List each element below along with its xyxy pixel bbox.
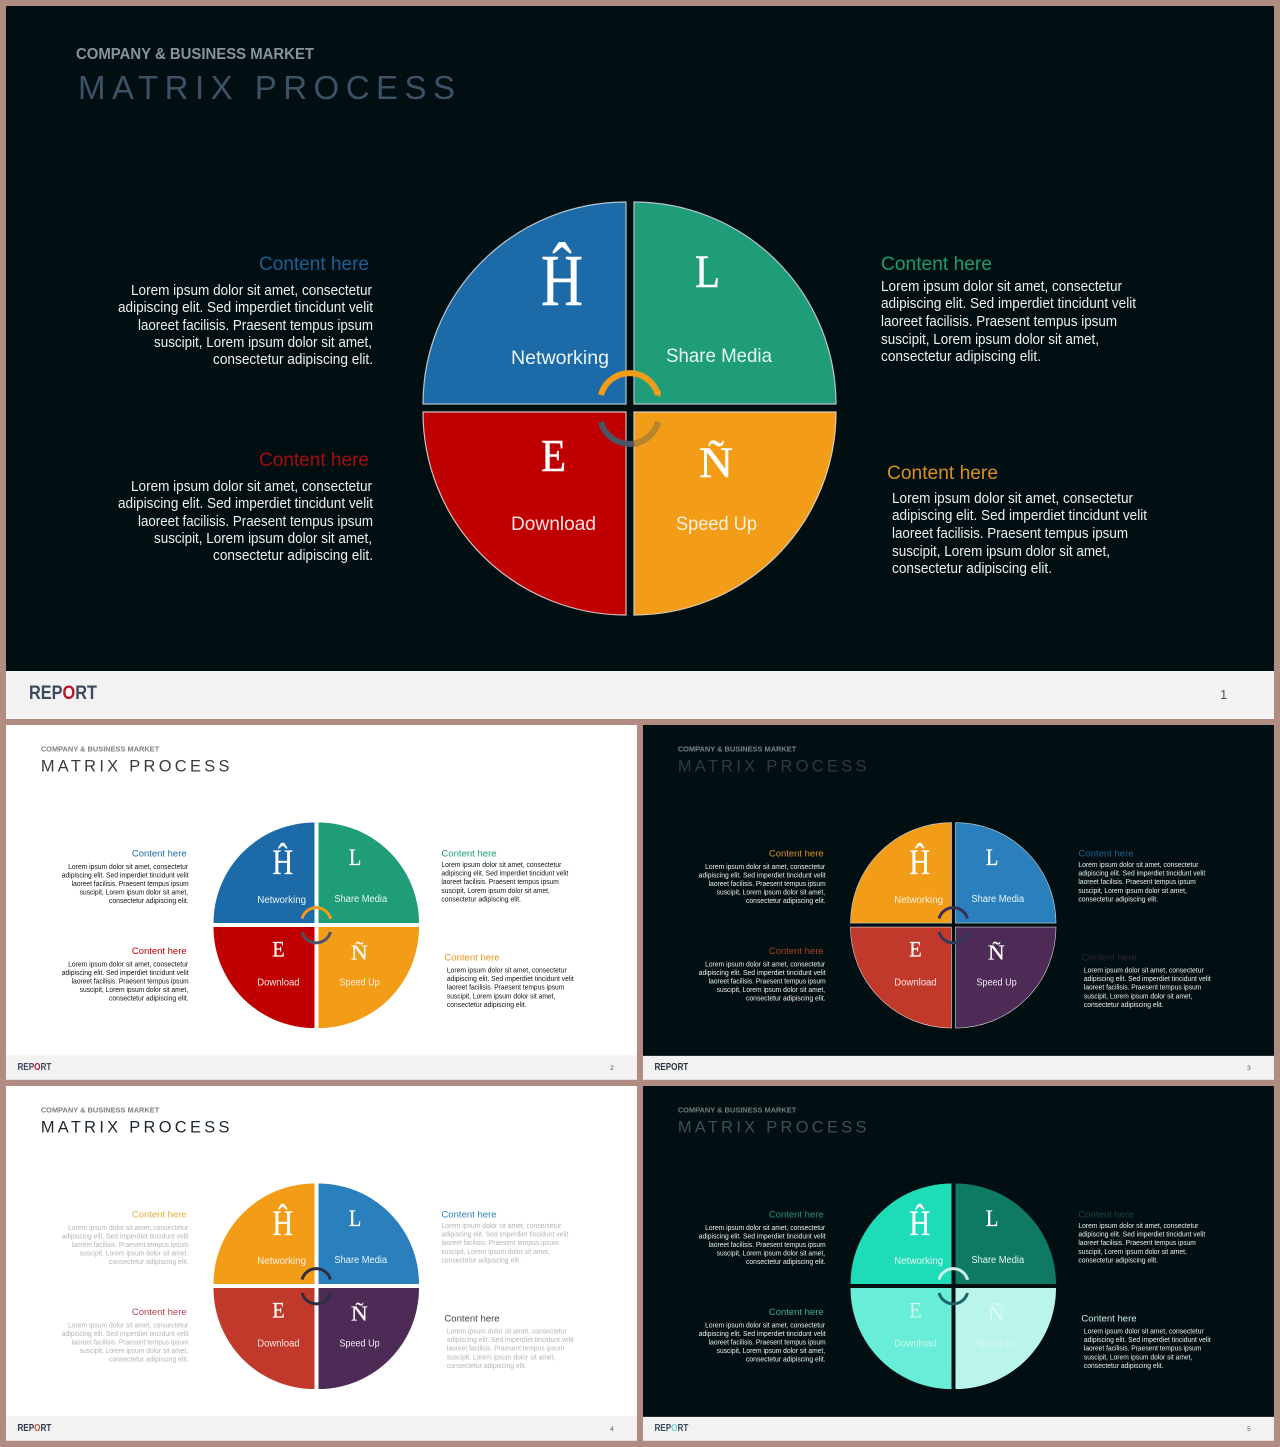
slide 5 background	[643, 1086, 1274, 1417]
body: suscipit, Lorem ipsum dolor sit amet,	[881, 332, 1099, 348]
slide 1 text block: bottom left	[118, 450, 373, 564]
body	[62, 959, 189, 1003]
body: suscipit, Lorem ipsum dolor sit amet,	[441, 1247, 550, 1256]
slide 2 quadrant: Share Media: Share Media	[334, 894, 388, 905]
body: suscipit, Lorem ipsum dolor sit amet,	[892, 544, 1110, 560]
slide 2 text block: top left	[62, 848, 189, 905]
body: laoreet facilisis. Praesent tempus ipsum	[709, 977, 826, 986]
body: consectetur adipiscing elit.	[746, 1355, 826, 1364]
body: laoreet facilisis. Praesent tempus ipsum	[72, 879, 189, 888]
slide 3 cycle arrows	[939, 908, 967, 943]
body	[1078, 1221, 1205, 1265]
slide 4 quadrant: Networking: Networking	[257, 1256, 306, 1267]
body: laoreet facilisis. Praesent tempus ipsum	[881, 314, 1117, 330]
heading: Content here	[259, 254, 369, 275]
slide 1 quadrant: Speed Up: Speed Up	[676, 513, 757, 535]
slide 1 quadrant: Networking: Ĥ	[541, 240, 583, 321]
body: adipiscing elit. Sed imperdiet tincidunt velit	[62, 870, 189, 879]
body: Lorem ipsum dolor sit amet, consectetur	[131, 283, 372, 299]
body: suscipit, Lorem ipsum dolor sit amet,	[717, 985, 825, 994]
body: laoreet facilisis. Praesent tempus ipsum	[441, 877, 559, 886]
slide 5 quadrant: Speed Up: Speed Up	[976, 1339, 1017, 1350]
slide 4 quadrant: Download: E	[272, 1297, 285, 1322]
slide 3 quadrant: Download: E	[909, 936, 922, 961]
slide 4 subtitle: COMPANY & BUSINESS MARKET	[41, 1105, 160, 1114]
body	[62, 1223, 189, 1266]
slide 2 quadrant: Speed Up	[318, 927, 419, 1028]
heading: Content here	[132, 1307, 187, 1318]
heading: Content here	[132, 946, 187, 957]
body: consectetur adipiscing elit.	[1084, 1000, 1163, 1009]
slide 3 quadrant: Speed Up: Speed Up	[976, 978, 1017, 989]
body: consectetur adipiscing elit.	[881, 349, 1041, 365]
slide 5 footer: REPORT	[654, 1423, 688, 1434]
body: adipiscing elit. Sed imperdiet tincidunt velit	[1084, 1335, 1211, 1344]
slide 2 text block: bottom left	[62, 946, 189, 1003]
body: Lorem ipsum dolor sit amet, consectetur	[1084, 1326, 1204, 1335]
body: suscipit, Lorem ipsum dolor sit amet,	[80, 1249, 188, 1258]
slide 1 subtitle: COMPANY & BUSINESS MARKET	[76, 46, 315, 63]
heading: Content here	[444, 1313, 500, 1324]
slide 4 quadrant: Networking	[213, 1184, 315, 1284]
body: adipiscing elit. Sed imperdiet tincidunt velit	[1078, 1229, 1205, 1238]
body: suscipit, Lorem ipsum dolor sit amet,	[441, 886, 550, 895]
body: laoreet facilisis. Praesent tempus ipsum	[441, 1238, 559, 1247]
body	[1084, 965, 1211, 1009]
slide 1 text block: top left	[118, 254, 373, 368]
body: consectetur adipiscing elit.	[213, 548, 373, 564]
body: Lorem ipsum dolor sit amet, consectetur	[441, 1221, 562, 1230]
slide 1 quadrant: Share Media	[634, 202, 836, 404]
slide 4 quadrant: Share Media: L	[349, 1206, 361, 1232]
slide 5 title: MATRIX PROCESS	[678, 1118, 866, 1136]
slide 4 quadrant: Speed Up: Ñ	[351, 1301, 368, 1325]
heading: Content here	[881, 254, 992, 275]
slide 5 quadrant: Share Media: L	[986, 1206, 998, 1232]
slide 3 text block: top right	[1078, 848, 1205, 904]
slide 1 text block: bottom right	[887, 463, 1147, 577]
body: consectetur adipiscing elit.	[213, 352, 373, 368]
slide 1 quadrant: Speed Up	[634, 412, 836, 615]
body: suscipit, Lorem ipsum dolor sit amet,	[1084, 992, 1192, 1001]
body: laoreet facilisis. Praesent tempus ipsum	[1078, 877, 1196, 886]
body: suscipit, Lorem ipsum dolor sit amet,	[80, 985, 188, 994]
slide 5 quadrant: Download	[850, 1288, 952, 1389]
body: laoreet facilisis. Praesent tempus ipsum	[1084, 1344, 1201, 1353]
slide 2 footer: REPORT	[17, 1062, 51, 1073]
body: consectetur adipiscing elit.	[1084, 1361, 1163, 1370]
slide 4 text block: bottom right	[444, 1313, 574, 1370]
slide 5 quadrant: Speed Up	[955, 1288, 1056, 1389]
body: consectetur adipiscing elit.	[109, 1257, 189, 1266]
slide 4 footer	[6, 1417, 637, 1441]
body: suscipit, Lorem ipsum dolor sit amet,	[1078, 886, 1187, 895]
body: adipiscing elit. Sed imperdiet tincidunt velit	[118, 496, 373, 512]
heading: Content here	[769, 848, 824, 859]
body	[447, 1326, 574, 1370]
body: adipiscing elit. Sed imperdiet tincidunt velit	[62, 968, 189, 977]
body: suscipit, Lorem ipsum dolor sit amet,	[447, 1353, 555, 1362]
slide 5 text block: top right	[1078, 1209, 1205, 1265]
body: suscipit, Lorem ipsum dolor sit amet,	[1078, 1247, 1187, 1256]
slide 4 text block: top right	[441, 1209, 568, 1265]
body: adipiscing elit. Sed imperdiet tincidunt velit	[699, 1231, 826, 1240]
slide 2 footer	[6, 1056, 637, 1080]
slide 5 quadrant: Networking: Ĥ	[909, 1203, 930, 1243]
slide 5 text block: top left	[699, 1209, 826, 1266]
body: adipiscing elit. Sed imperdiet tincidunt velit	[441, 1229, 568, 1238]
body	[441, 1221, 568, 1265]
slide 4 footer: 4	[610, 1426, 614, 1433]
heading: Content here	[441, 848, 497, 859]
body: laoreet facilisis. Praesent tempus ipsum	[709, 1240, 826, 1249]
slide 2 quadrant: Networking	[213, 823, 315, 923]
heading: Content here	[1078, 848, 1134, 859]
slide 2 text block: bottom right	[444, 952, 574, 1009]
body: Lorem ipsum dolor sit amet, consectetur	[1084, 965, 1204, 974]
slide 5: dark slide, teal palette	[643, 1086, 1274, 1441]
slide 5 quadrant: Networking: Networking	[894, 1256, 943, 1267]
body: laoreet facilisis. Praesent tempus ipsum	[138, 318, 373, 334]
slide 3 quadrant: Networking	[850, 823, 952, 923]
body: Lorem ipsum dolor sit amet, consectetur	[131, 479, 372, 495]
body: adipiscing elit. Sed imperdiet tincidunt velit	[699, 870, 826, 879]
body: adipiscing elit. Sed imperdiet tincidunt velit	[892, 508, 1147, 524]
slide 4 quadrant: Download	[213, 1288, 315, 1389]
slide 3 title: MATRIX PROCESS	[678, 757, 866, 775]
body: suscipit, Lorem ipsum dolor sit amet,	[80, 888, 188, 897]
body	[118, 283, 373, 368]
body: consectetur adipiscing elit.	[109, 994, 189, 1003]
heading: Content here	[132, 848, 187, 859]
slide 2 title: MATRIX PROCESS	[41, 757, 229, 775]
body	[118, 479, 373, 564]
slide 3 background	[643, 725, 1274, 1056]
slide 2 quadrant: Download: Download	[257, 978, 300, 989]
slide 1 quadrant: Speed Up: Ñ	[699, 440, 733, 487]
body: suscipit, Lorem ipsum dolor sit amet,	[447, 992, 555, 1001]
body: Lorem ipsum dolor sit amet, consectetur	[68, 1223, 189, 1232]
body: consectetur adipiscing elit.	[746, 896, 826, 905]
body	[62, 862, 189, 905]
body: consectetur adipiscing elit.	[447, 1361, 526, 1370]
body: adipiscing elit. Sed imperdiet tincidunt velit	[118, 300, 373, 316]
slide 2 quadrant: Download	[213, 927, 315, 1028]
body: adipiscing elit. Sed imperdiet tincidunt velit	[699, 968, 826, 977]
heading: Content here	[444, 952, 500, 963]
slide 1 footer: REPORT	[29, 682, 97, 704]
body: adipiscing elit. Sed imperdiet tincidunt velit	[1078, 868, 1205, 877]
body: Lorem ipsum dolor sit amet, consectetur	[705, 1223, 826, 1232]
body: Lorem ipsum dolor sit amet, consectetur	[68, 862, 189, 871]
body: laoreet facilisis. Praesent tempus ipsum	[1078, 1238, 1196, 1247]
slide 4: white slide, warm palette, grey body text	[6, 1086, 637, 1441]
body: suscipit, Lorem ipsum dolor sit amet,	[1084, 1353, 1192, 1362]
body: consectetur adipiscing elit.	[746, 1257, 826, 1266]
slide 2 quadrant: Download: E	[272, 936, 285, 961]
body: suscipit, Lorem ipsum dolor sit amet,	[154, 335, 372, 351]
slide 5 quadrant: Share Media	[955, 1184, 1056, 1284]
slide 3 text block: bottom right	[1081, 952, 1211, 1009]
body: laoreet facilisis. Praesent tempus ipsum	[1084, 983, 1201, 992]
slide 4 text block: bottom left	[62, 1307, 189, 1364]
body: suscipit, Lorem ipsum dolor sit amet,	[717, 888, 825, 897]
slide 3 quadrant: Share Media: L	[986, 845, 998, 871]
slide 1 text block: top right	[881, 254, 1136, 365]
body: Lorem ipsum dolor sit amet, consectetur	[881, 279, 1122, 295]
body: laoreet facilisis. Praesent tempus ipsum	[892, 526, 1128, 542]
slide 4 quadrant: Download: Download	[257, 1339, 300, 1350]
body: Lorem ipsum dolor sit amet, consectetur	[705, 1320, 826, 1329]
body: Lorem ipsum dolor sit amet, consectetur	[705, 862, 826, 871]
slide 4 quadrant: Speed Up	[318, 1288, 419, 1389]
slide 4 quadrant: Share Media: Share Media	[334, 1255, 388, 1266]
body: suscipit, Lorem ipsum dolor sit amet,	[80, 1346, 188, 1355]
slide 1 footer: 1	[1220, 687, 1227, 702]
body: adipiscing elit. Sed imperdiet tincidunt velit	[881, 296, 1136, 312]
body	[892, 491, 1147, 577]
body: suscipit, Lorem ipsum dolor sit amet,	[717, 1249, 825, 1258]
heading: Content here	[1081, 1313, 1137, 1324]
slide 5 subtitle: COMPANY & BUSINESS MARKET	[678, 1105, 797, 1114]
body	[447, 965, 574, 1009]
heading: Content here	[1078, 1209, 1134, 1220]
slide 3 footer: 3	[1247, 1065, 1251, 1072]
body	[699, 1223, 826, 1266]
body: laoreet facilisis. Praesent tempus ipsum	[72, 1240, 189, 1249]
slide 3 quadrant: Speed Up: Ñ	[988, 940, 1005, 964]
slide 3: dark slide, warm palette	[643, 725, 1274, 1080]
slide 1 quadrant: Download: Download	[511, 513, 596, 535]
heading: Content here	[769, 1307, 824, 1318]
slide 5 footer: 5	[1247, 1426, 1251, 1433]
slide 2: white slide	[6, 725, 637, 1080]
heading: Content here	[769, 946, 824, 957]
slide 1 quadrant: Download: E	[541, 431, 566, 481]
body: consectetur adipiscing elit.	[109, 896, 189, 905]
heading: Content here	[132, 1209, 187, 1220]
slide 5 footer	[643, 1417, 1274, 1441]
body: Lorem ipsum dolor sit amet, consectetur	[447, 965, 567, 974]
slide 3 subtitle: COMPANY & BUSINESS MARKET	[678, 744, 797, 753]
slide 4 quadrant: Share Media	[318, 1184, 419, 1284]
slide 3 text block: bottom left	[699, 946, 826, 1003]
body	[441, 860, 568, 904]
body: laoreet facilisis. Praesent tempus ipsum	[72, 1338, 189, 1347]
body: laoreet facilisis. Praesent tempus ipsum	[447, 983, 564, 992]
body	[699, 1320, 826, 1364]
body: suscipit, Lorem ipsum dolor sit amet,	[717, 1346, 825, 1355]
heading: Content here	[259, 450, 369, 471]
slide 1 footer	[6, 671, 1274, 719]
slide 1: large dark slide	[6, 6, 1274, 719]
slide 1 title: MATRIX PROCESS	[78, 69, 455, 106]
slide 2 text block: top right	[441, 848, 568, 904]
slide 5 quadrant: Share Media: Share Media	[971, 1255, 1025, 1266]
body	[1084, 1326, 1211, 1370]
slide 4 cycle arrows	[302, 1269, 330, 1304]
slide 5 quadrant: Networking	[850, 1184, 952, 1284]
slide 5 quadrant: Download: Download	[894, 1339, 937, 1350]
slide 3 quadrant: Share Media	[955, 823, 1056, 923]
slide 5 text block: bottom right	[1081, 1313, 1211, 1370]
body	[1078, 860, 1205, 904]
slide 3 quadrant: Download	[850, 927, 952, 1028]
slide 3 footer: REPORT	[654, 1062, 688, 1073]
slide 1 quadrant: Networking	[423, 202, 626, 404]
body: Lorem ipsum dolor sit amet, consectetur	[1078, 1221, 1199, 1230]
body: adipiscing elit. Sed imperdiet tincidunt velit	[699, 1329, 826, 1338]
slide 5 text block: bottom left	[699, 1307, 826, 1364]
slide 2 cycle arrows	[302, 908, 332, 943]
body: laoreet facilisis. Praesent tempus ipsum	[72, 977, 189, 986]
body: consectetur adipiscing elit.	[441, 1256, 521, 1265]
body: Lorem ipsum dolor sit amet, consectetur	[68, 1320, 189, 1329]
slide 4 footer: REPORT	[17, 1423, 51, 1434]
slide 4 title: MATRIX PROCESS	[41, 1118, 229, 1136]
slide 4 quadrant: Speed Up: Speed Up	[339, 1339, 380, 1350]
slide 2 subtitle: COMPANY & BUSINESS MARKET	[41, 744, 160, 753]
body: laoreet facilisis. Praesent tempus ipsum	[709, 1338, 826, 1347]
body: adipiscing elit. Sed imperdiet tincidunt velit	[447, 974, 574, 983]
body	[699, 959, 826, 1003]
body: consectetur adipiscing elit.	[892, 561, 1052, 577]
body: consectetur adipiscing elit.	[1078, 1256, 1158, 1265]
slide 5 quadrant: Download: E	[909, 1297, 922, 1322]
slide 1 quadrant: Share Media: L	[695, 246, 720, 298]
slide 4 background	[6, 1086, 637, 1417]
slide 3 quadrant: Networking: Networking	[894, 895, 943, 906]
body: laoreet facilisis. Praesent tempus ipsum	[709, 879, 826, 888]
body: consectetur adipiscing elit.	[746, 994, 826, 1003]
body: adipiscing elit. Sed imperdiet tincidunt velit	[62, 1231, 189, 1240]
slide 2 quadrant: Speed Up: Ñ	[351, 940, 368, 964]
body: consectetur adipiscing elit.	[109, 1355, 189, 1364]
body: adipiscing elit. Sed imperdiet tincidunt velit	[441, 868, 568, 877]
heading: Content here	[1081, 952, 1137, 963]
slide 1 quadrant: Download	[423, 412, 626, 615]
slide 2 background	[6, 725, 637, 1056]
heading: Content here	[441, 1209, 497, 1220]
body: consectetur adipiscing elit.	[1078, 895, 1158, 904]
slide 1 quadrant: Networking: Networking	[511, 347, 609, 369]
slide 2 quadrant: Speed Up: Speed Up	[339, 978, 380, 989]
body: laoreet facilisis. Praesent tempus ipsum	[447, 1344, 564, 1353]
slide 2 quadrant: Networking: Networking	[257, 895, 306, 906]
slide 5 quadrant: Speed Up: Ñ	[988, 1301, 1005, 1325]
slide 2 footer: 2	[610, 1065, 614, 1072]
body: Lorem ipsum dolor sit amet, consectetur	[705, 959, 826, 968]
body: Lorem ipsum dolor sit amet, consectetur	[1078, 860, 1199, 869]
slide 1 cycle arrows	[601, 373, 661, 444]
body	[699, 862, 826, 905]
slide 1 quadrant: Share Media: Share Media	[666, 345, 772, 367]
heading: Content here	[887, 463, 998, 484]
slide 3 quadrant: Speed Up	[955, 927, 1056, 1028]
slide 5 cycle arrows	[939, 1269, 969, 1304]
body: consectetur adipiscing elit.	[441, 895, 521, 904]
heading: Content here	[769, 1209, 824, 1220]
slide 3 quadrant: Networking: Ĥ	[909, 842, 930, 882]
body: Lorem ipsum dolor sit amet, consectetur	[447, 1326, 567, 1335]
slide 3 footer	[643, 1056, 1274, 1080]
body: adipiscing elit. Sed imperdiet tincidunt velit	[62, 1329, 189, 1338]
body	[881, 279, 1136, 365]
body	[62, 1320, 189, 1364]
slide 2 quadrant: Networking: Ĥ	[272, 842, 293, 882]
slide 3 text block: top left	[699, 848, 826, 905]
body: consectetur adipiscing elit.	[447, 1000, 526, 1009]
body: adipiscing elit. Sed imperdiet tincidunt velit	[447, 1335, 574, 1344]
slide 1 background	[6, 6, 1274, 671]
body: suscipit, Lorem ipsum dolor sit amet,	[154, 531, 372, 547]
slide 2 quadrant: Share Media: L	[349, 845, 361, 871]
body: adipiscing elit. Sed imperdiet tincidunt velit	[1084, 974, 1211, 983]
slide 4 text block: top left	[62, 1209, 189, 1266]
body: laoreet facilisis. Praesent tempus ipsum	[138, 514, 373, 530]
slide 4 quadrant: Networking: Ĥ	[272, 1203, 293, 1243]
body: Lorem ipsum dolor sit amet, consectetur	[892, 491, 1133, 507]
slide 3 quadrant: Share Media: Share Media	[971, 894, 1025, 905]
slide 2 quadrant: Share Media	[318, 823, 419, 923]
body: Lorem ipsum dolor sit amet, consectetur	[68, 959, 189, 968]
body: Lorem ipsum dolor sit amet, consectetur	[441, 860, 562, 869]
slide 3 quadrant: Download: Download	[894, 978, 937, 989]
